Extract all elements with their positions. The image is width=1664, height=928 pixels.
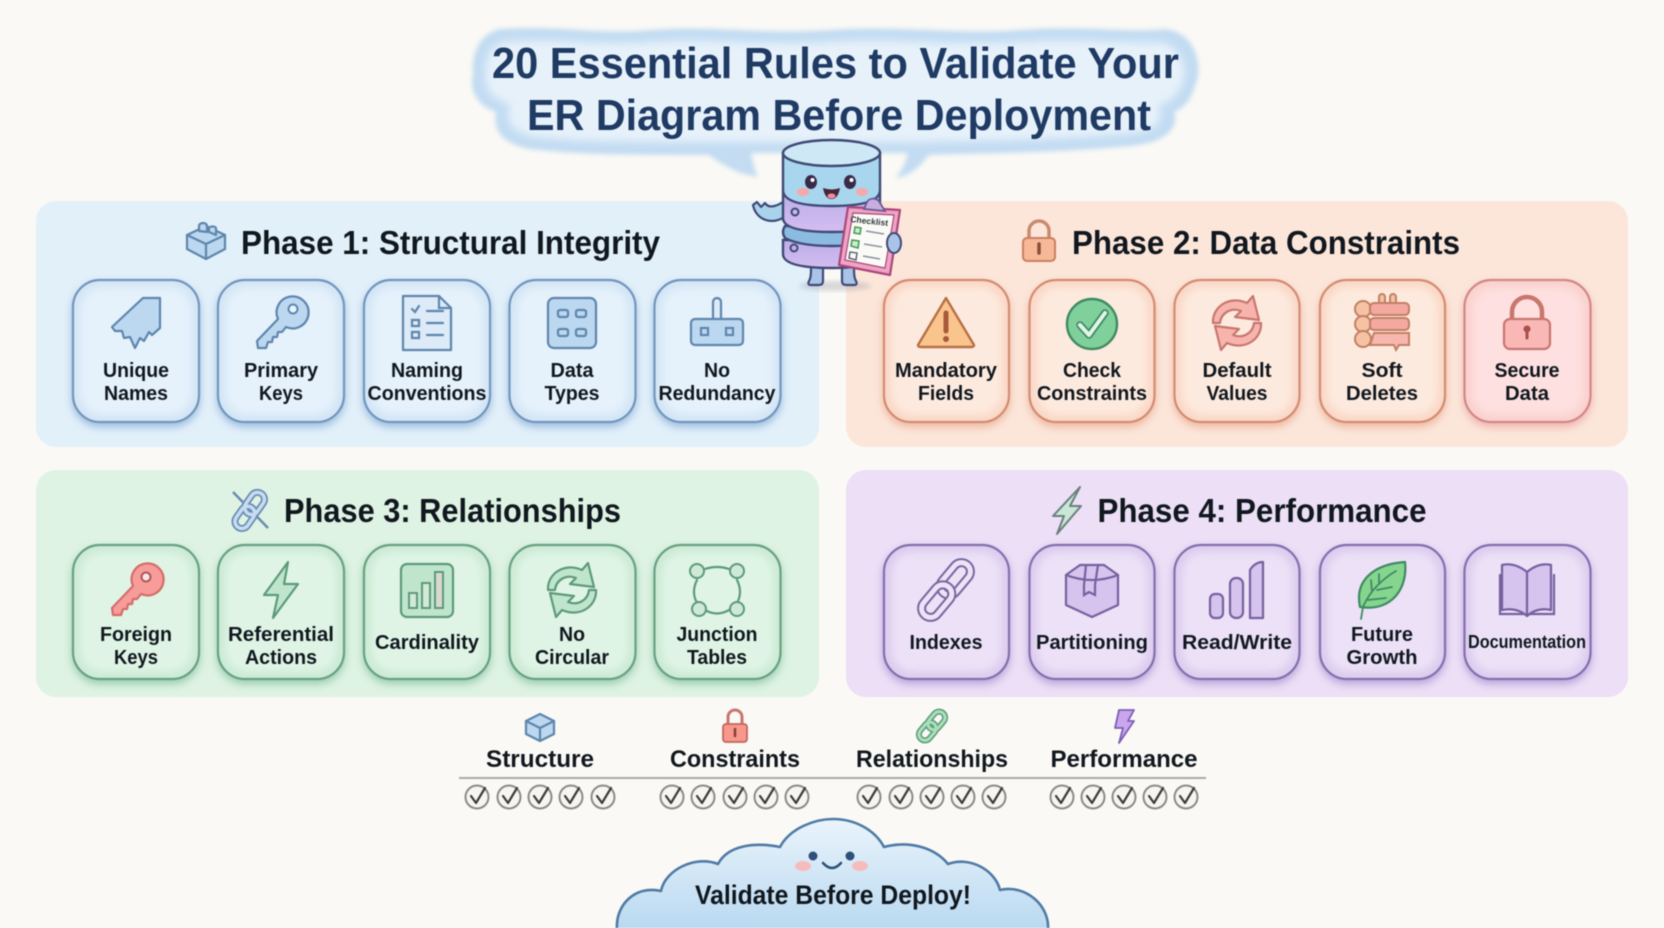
icon: tag xyxy=(112,298,160,348)
label: Tables xyxy=(687,646,747,669)
left arm xyxy=(753,200,786,221)
label xyxy=(244,359,319,405)
label: Referential xyxy=(228,623,334,646)
card: Documentation xyxy=(1464,545,1590,679)
card: Soft Deletes xyxy=(1320,280,1445,422)
label: Check xyxy=(1063,359,1122,382)
card: Data Types xyxy=(510,280,636,422)
label: Constraints xyxy=(1037,382,1147,405)
label: Circular xyxy=(535,646,609,669)
label: Secure xyxy=(1494,359,1560,382)
label: Documentation xyxy=(1468,632,1586,652)
card: Foreign Keys xyxy=(73,545,199,679)
label: No xyxy=(704,359,730,382)
clipboard: Checklist xyxy=(850,214,889,228)
title text: ER Diagram Before Deployment xyxy=(527,91,1151,140)
label xyxy=(1037,359,1147,405)
label: Indexes xyxy=(910,631,982,654)
label xyxy=(535,623,609,669)
legend: performance xyxy=(1050,710,1198,773)
checkmarks: constraints xyxy=(660,786,808,808)
card: No Redundancy xyxy=(654,280,780,422)
cloud: validate before deploy xyxy=(617,819,1048,928)
icon: secure lock xyxy=(1504,297,1550,349)
label xyxy=(100,623,172,669)
label: Names xyxy=(104,382,168,405)
card: No Circular xyxy=(510,545,636,679)
card: Cardinality xyxy=(364,545,490,679)
label: Constraints xyxy=(670,746,800,773)
icon: bar chart frame xyxy=(401,564,453,617)
heading: phase 4: Phase 4: Performance xyxy=(1098,492,1426,529)
label: Keys xyxy=(114,646,158,669)
label: Soft xyxy=(1362,359,1403,382)
card: Junction Tables xyxy=(654,545,780,679)
label: Deletes xyxy=(1346,382,1418,405)
icon: box xyxy=(1066,565,1118,617)
card: Referential Actions xyxy=(218,545,344,679)
label: Values xyxy=(1206,382,1268,405)
title xyxy=(475,31,1195,173)
cloud face xyxy=(795,852,868,871)
icon: purple bolt xyxy=(1115,710,1134,743)
legend: relationships xyxy=(856,709,1008,773)
heading: phase 1: Phase 1: Structural Integrity xyxy=(241,224,661,261)
card: Default Values xyxy=(1174,280,1300,422)
label: Data xyxy=(1505,382,1550,405)
label: Primary xyxy=(244,359,319,382)
label: Fields xyxy=(918,382,974,405)
card: Naming Conventions xyxy=(364,280,490,422)
card: Unique Names xyxy=(73,280,199,422)
label: Unique xyxy=(103,359,169,382)
label: Types xyxy=(544,382,600,405)
label: Relationships xyxy=(856,746,1008,773)
speech bubble xyxy=(475,31,1195,173)
label xyxy=(228,623,334,669)
label: No xyxy=(559,623,585,646)
title text: 20 Essential Rules to Validate Your xyxy=(492,39,1179,88)
label: Keys xyxy=(259,382,303,405)
label: Structure xyxy=(486,746,594,773)
label: Future xyxy=(1351,623,1413,646)
label xyxy=(895,359,998,405)
mascot: database character with checklist xyxy=(753,140,901,291)
icon: single connector xyxy=(691,298,743,345)
icon: stacked rows xyxy=(1355,294,1409,350)
label xyxy=(103,359,169,405)
clipboard xyxy=(839,199,901,275)
icon: green cycle arrows xyxy=(548,563,596,617)
panel: phase 3 relationships xyxy=(36,470,819,697)
legs xyxy=(808,258,857,285)
label xyxy=(658,359,776,405)
icon: building block xyxy=(187,223,225,259)
card: Primary Keys xyxy=(218,280,344,422)
card: Check Constraints xyxy=(1030,280,1154,422)
icon: junction nodes xyxy=(690,564,744,616)
label xyxy=(676,623,758,669)
legend: constraints xyxy=(670,710,800,773)
label: Performance xyxy=(1050,746,1198,773)
label xyxy=(1202,359,1272,405)
cloud label: Validate Before Deploy! xyxy=(695,880,971,910)
card: Partitioning xyxy=(1030,545,1154,679)
icon: green link xyxy=(916,709,948,743)
icon: document checklist xyxy=(403,296,451,350)
label: Redundancy xyxy=(658,382,776,405)
checkmarks: relationships xyxy=(858,786,1006,808)
label: Naming xyxy=(391,359,463,382)
icon: green check xyxy=(1067,299,1117,349)
label: Partitioning xyxy=(1036,631,1148,654)
icon: warning triangle xyxy=(918,298,974,347)
icon: key xyxy=(257,296,309,348)
title text xyxy=(492,39,1179,140)
label: Conventions xyxy=(368,382,486,405)
heading: phase 3: Phase 3: Relationships xyxy=(284,492,621,529)
card: Read/Write xyxy=(1174,545,1300,679)
icon: signal bars xyxy=(1210,562,1263,618)
label: Read/Write xyxy=(1182,631,1292,654)
card: Future Growth xyxy=(1320,545,1445,679)
icon: green bolt xyxy=(264,562,298,618)
summary row xyxy=(459,709,1206,808)
face xyxy=(790,175,868,252)
legend: structure xyxy=(486,714,594,773)
label: Foreign xyxy=(100,623,172,646)
icon: lock xyxy=(1023,221,1055,261)
label xyxy=(1346,359,1418,405)
label xyxy=(544,359,600,405)
icon: crossed link xyxy=(232,490,268,531)
icon: bolt xyxy=(1053,487,1081,534)
label: Mandatory xyxy=(895,359,998,382)
icon: red lock xyxy=(723,710,747,742)
label: Cardinality xyxy=(375,631,480,654)
card: Mandatory Fields xyxy=(884,280,1009,422)
icon: open book xyxy=(1500,564,1554,616)
icon: red key xyxy=(112,563,164,615)
database body xyxy=(783,140,880,268)
panel: phase 2 data constraints xyxy=(846,201,1628,447)
checkmarks: performance xyxy=(1050,786,1198,808)
icon: refresh arrows xyxy=(1213,296,1261,350)
label: Actions xyxy=(245,646,317,669)
label: Data xyxy=(550,359,594,382)
icon: chain link xyxy=(918,559,974,621)
checkmarks: structure xyxy=(466,786,614,808)
label: Junction xyxy=(676,623,758,646)
label xyxy=(1494,359,1560,405)
card: Indexes xyxy=(884,545,1009,679)
icon: leaf xyxy=(1359,562,1405,619)
label xyxy=(1346,623,1418,669)
heading: phase 2: Phase 2: Data Constraints xyxy=(1072,224,1460,261)
panel: phase 1 structural integrity xyxy=(36,201,819,447)
icon: data grid xyxy=(548,298,596,348)
label xyxy=(368,359,486,405)
label: Growth xyxy=(1346,646,1418,669)
icon: block xyxy=(526,714,554,741)
card: Secure Data xyxy=(1464,280,1590,422)
panel: phase 4 performance xyxy=(846,470,1628,697)
label: Default xyxy=(1202,359,1272,382)
